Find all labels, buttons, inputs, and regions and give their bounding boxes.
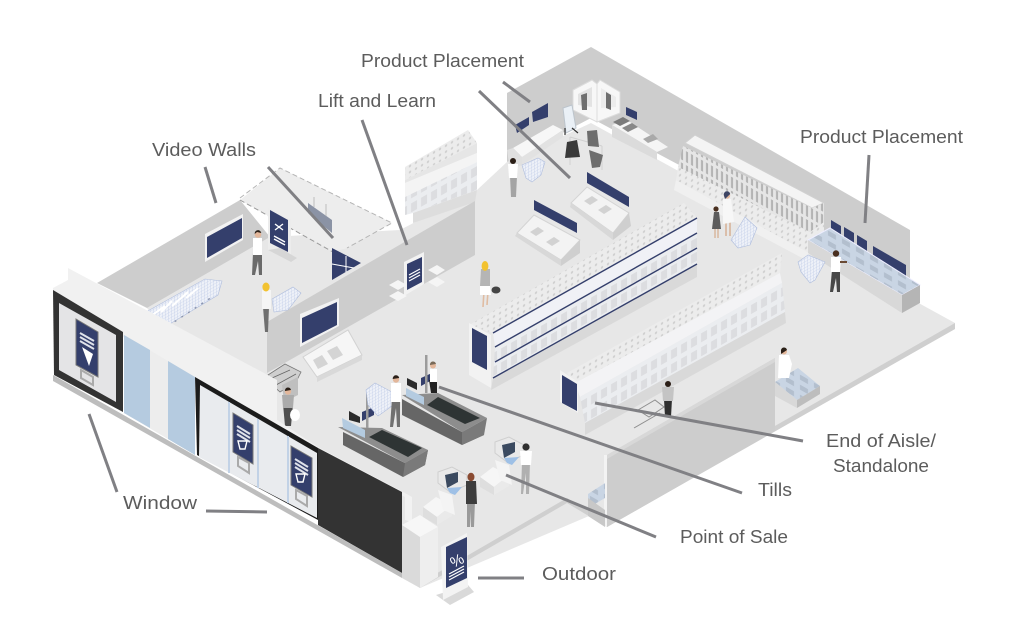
front right wall <box>604 358 775 527</box>
person: woman in white dress <box>723 191 734 236</box>
icon: outdoor sign <box>436 533 474 605</box>
self checkout kiosk rear <box>480 437 524 495</box>
icon: shopping cart at shelving <box>731 217 757 248</box>
label: Tills <box>439 387 792 500</box>
label: Tills: Tills <box>758 480 792 500</box>
person: man at checkout <box>520 443 532 494</box>
icon: dark stacked carts <box>268 364 301 402</box>
person: counter assistant <box>778 347 792 378</box>
lift and learn sign with shelves <box>389 252 445 301</box>
label: Window <box>89 414 267 513</box>
till counter one <box>338 390 428 477</box>
display counter on right wall <box>808 220 920 313</box>
icon: window phone sign middle <box>233 413 253 473</box>
icon: window phone sign left <box>76 319 98 385</box>
label: Product Placement right: Product Placement <box>800 127 963 147</box>
store floor <box>147 123 955 588</box>
person: blond woman with bag <box>480 261 500 307</box>
icon: shopping cart at till <box>366 383 392 416</box>
label: End of Aisle / Standalone <box>595 403 936 476</box>
icon: shopping cart at back wall <box>522 158 545 182</box>
corner pillar <box>402 493 438 588</box>
label: End of Aisle / Standalone: Standalone <box>833 456 929 476</box>
product placement display bin upper <box>570 172 631 240</box>
person: cashier <box>429 361 437 393</box>
clothes rack <box>565 130 603 170</box>
person: blond shopper <box>262 282 271 332</box>
icon: shopping cart at counter <box>798 255 825 283</box>
panel: aisle gondola one <box>469 203 697 390</box>
glass room with dashed outline <box>240 168 392 252</box>
video wall screen on left wall <box>205 214 243 262</box>
label: Product Placement top: Product Placement <box>361 51 524 71</box>
label: Product Placement right <box>800 127 963 223</box>
icon: shopping cart by partition <box>272 287 301 312</box>
icon: small wire cart near aisle <box>634 400 664 428</box>
label: Point of Sale <box>506 475 788 547</box>
person: woman at checkout <box>466 473 477 527</box>
self checkout kiosk front <box>423 467 467 525</box>
person: child <box>712 206 721 238</box>
icon: outdoor sign: % <box>447 550 467 572</box>
partition wall <box>267 201 475 373</box>
label: Lift and Learn <box>318 91 436 245</box>
icon: window phone sign right <box>291 446 312 506</box>
panel: back wall shelving <box>674 135 824 260</box>
person: man at kiosk <box>252 230 262 275</box>
video wall navy panels <box>332 248 361 280</box>
label: Outdoor <box>478 564 616 584</box>
panel: wall shelving unit <box>405 130 477 223</box>
product placement display bin lower <box>515 200 580 266</box>
panel: aisle gondola two <box>560 253 786 435</box>
label: Outdoor: Outdoor <box>542 564 616 584</box>
label: Point of Sale: Point of Sale <box>680 527 788 547</box>
partition wall screen <box>300 298 339 347</box>
back walls <box>97 47 910 308</box>
panel: front facade <box>53 268 405 578</box>
label: Product Placement top <box>361 51 570 178</box>
person: till assistant <box>390 375 401 427</box>
small glass cabinet <box>588 483 605 527</box>
panel: wardrobe and back display <box>507 80 668 170</box>
label: End of Aisle / Standalone: End of Aisle/ <box>826 431 936 451</box>
angled display bin in room <box>303 330 362 382</box>
counter behind front right wall <box>775 368 820 408</box>
person: man at display counter <box>830 250 847 292</box>
person: shopper in grey <box>282 387 300 426</box>
grey ceiling video screen <box>308 197 332 233</box>
label: Video Walls: Video Walls <box>152 140 256 160</box>
label: Lift and Learn: Lift and Learn <box>318 91 436 111</box>
person: shopper in aisle <box>662 381 674 417</box>
label: Video Walls <box>152 140 333 238</box>
icon: digital kiosk in room <box>268 208 297 262</box>
label: Window: Window <box>123 493 198 513</box>
till counter two <box>402 355 487 445</box>
icon: shopping carts stack <box>146 279 222 329</box>
person: woman at back cart <box>508 158 518 197</box>
